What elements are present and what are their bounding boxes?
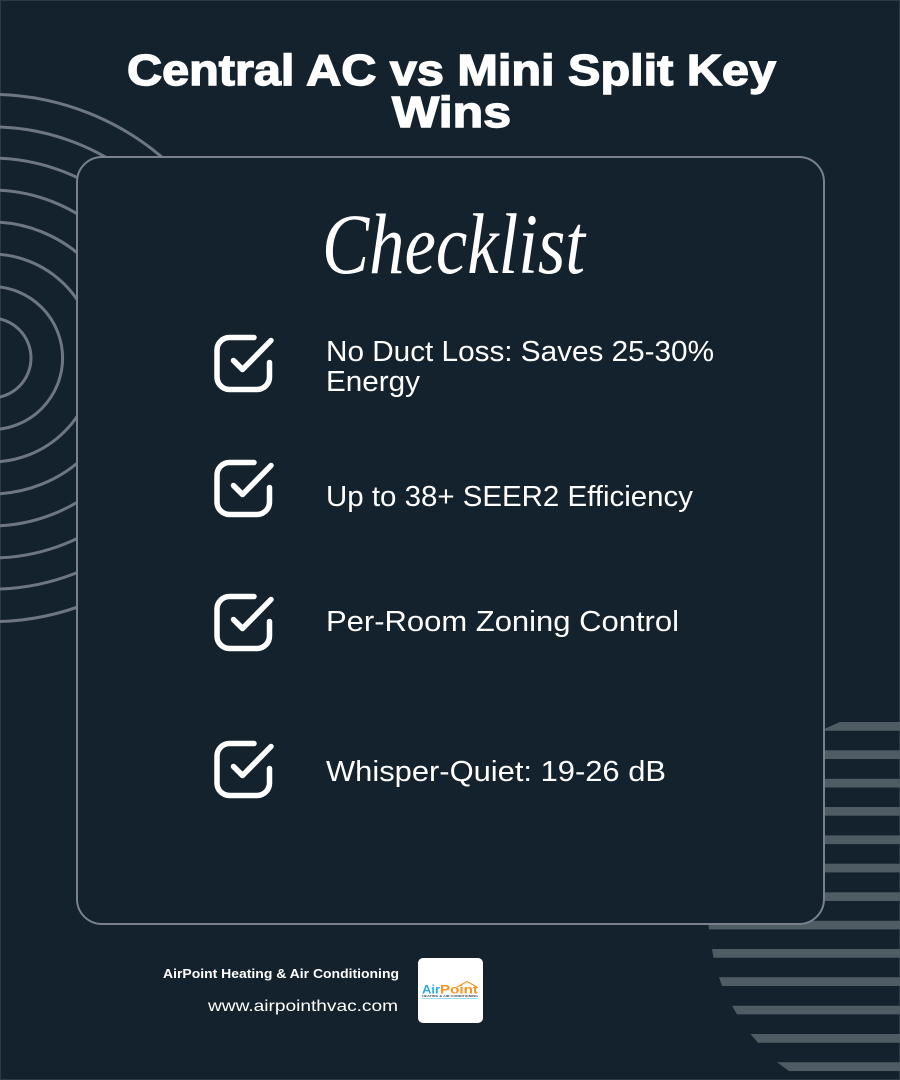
title: Central AC vs Mini Split Key [127, 46, 777, 95]
item 2: SEER2 efficiency [217, 462, 694, 514]
title [127, 46, 777, 137]
item 1: no duct loss [217, 336, 714, 398]
checklist heading: Checklist [322, 196, 587, 292]
item 2: SEER2 efficiency: Up to 38+ SEER2 Efficiency [326, 481, 694, 513]
title: Wins [392, 88, 511, 137]
footer company name and URL: AirPoint Heating & Air Conditioning [163, 966, 399, 981]
item 1: no duct loss: Energy [326, 366, 421, 398]
panel: checklist card [77, 157, 824, 924]
item 4: whisper quiet: Whisper-Quiet: 19-26 dB [326, 756, 666, 788]
item 4: whisper quiet [217, 744, 666, 796]
logo: Air [422, 982, 440, 996]
footer company name and URL: www.airpointhvac.com [207, 998, 398, 1015]
item 3: zoning control: Per-Room Zoning Control [326, 606, 679, 638]
logo: Point [440, 982, 478, 996]
decorative concentric arcs [0, 94, 255, 622]
item 1: no duct loss: No Duct Loss: Saves 25-30% [326, 336, 714, 368]
logo: HEATING & AIR CONDITIONING [422, 994, 479, 998]
logo [418, 958, 483, 1023]
item 3: zoning control [217, 596, 679, 648]
decorative stripes [708, 722, 900, 1071]
footer company name and URL [163, 966, 399, 1015]
